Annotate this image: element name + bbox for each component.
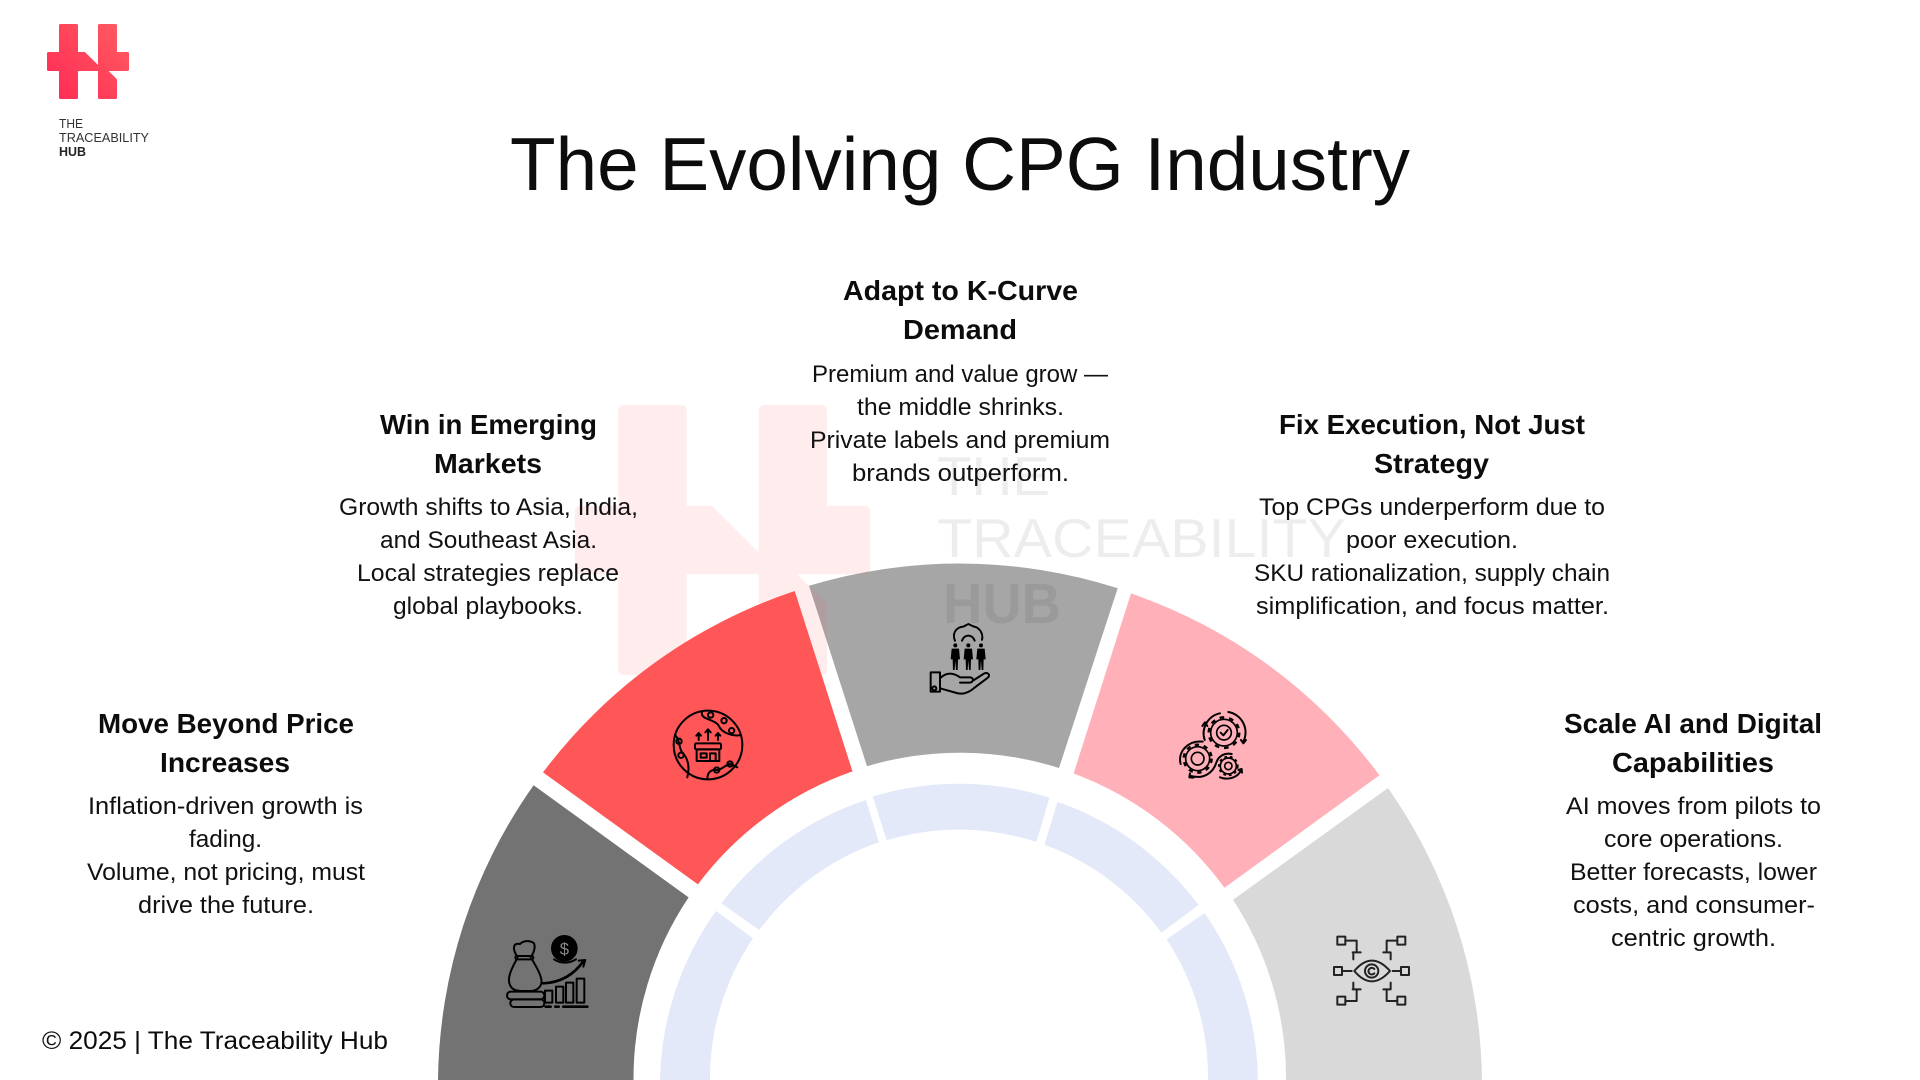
- logo: [48, 26, 149, 159]
- heading: Scale AI and Digital: [1564, 708, 1822, 739]
- body text: Better forecasts, lower: [1570, 859, 1817, 886]
- heading: [380, 409, 597, 479]
- logo mark: [48, 26, 128, 98]
- body text: SKU rationalization, supply chain: [1254, 560, 1610, 587]
- heading: Fix Execution, Not Just: [1279, 409, 1585, 440]
- logo wordmark: [59, 116, 149, 159]
- watermark: logo and wordmark: THE: [937, 445, 1050, 507]
- logo wordmark: HUB: [59, 144, 86, 159]
- body text: Volume, not pricing, must: [87, 859, 365, 886]
- body text: and Southeast Asia.: [380, 527, 597, 554]
- body text: global playbooks.: [393, 593, 583, 620]
- panel: win in emerging markets: [339, 409, 638, 620]
- body text: Top CPGs underperform due to: [1259, 494, 1605, 521]
- copyright: © 2025 | The Traceability Hub: [42, 1027, 388, 1055]
- heading: Markets: [434, 448, 542, 479]
- segment: move beyond price increases: [438, 785, 689, 1080]
- title: The Evolving CPG Industry: [510, 122, 1410, 206]
- segment: fix execution: [1074, 593, 1379, 888]
- panel: fix execution, not just strategy: [1254, 409, 1610, 620]
- watermark: logo and wordmark: [580, 410, 1346, 670]
- panel: adapt to k-curve demand: [810, 275, 1110, 487]
- body text: Local strategies replace: [357, 560, 619, 587]
- body text: Premium and value grow —: [812, 361, 1108, 388]
- semicircle chart: outer ring segments: [438, 564, 1482, 1080]
- heading: [843, 275, 1078, 345]
- body text: brands outperform.: [852, 460, 1069, 487]
- body text: Inflation-driven growth is: [88, 793, 363, 820]
- body text: centric growth.: [1611, 925, 1776, 952]
- body text: [87, 793, 365, 919]
- body text: costs, and consumer-: [1573, 892, 1815, 919]
- panel: scale ai and digital capabilities: [1564, 708, 1822, 952]
- body text: simplification, and focus matter.: [1256, 593, 1609, 620]
- body text: core operations.: [1604, 826, 1783, 853]
- heading: [1279, 409, 1585, 479]
- heading: Win in Emerging: [380, 409, 597, 440]
- body text: drive the future.: [138, 892, 314, 919]
- icon: money bag and rising bar chart: [507, 936, 587, 1007]
- body text: fading.: [189, 826, 262, 853]
- body text: [1566, 793, 1821, 952]
- logo wordmark: THE: [59, 116, 83, 131]
- body text: [810, 361, 1110, 487]
- icon: money bag and rising bar chart: $: [560, 939, 569, 958]
- icon: digital eye circuit: [1334, 937, 1409, 1005]
- body text: [1254, 494, 1610, 620]
- body text: poor execution.: [1346, 527, 1518, 554]
- heading: Capabilities: [1612, 747, 1774, 778]
- body text: Growth shifts to Asia, India,: [339, 494, 638, 521]
- icon: people on hand with gear: [931, 624, 989, 694]
- heading: Demand: [903, 314, 1017, 345]
- watermark: logo and wordmark: HUB: [943, 572, 1061, 636]
- segment: scale ai and digital: [1233, 788, 1482, 1080]
- body text: Private labels and premium: [810, 427, 1110, 454]
- heading: [1564, 708, 1822, 778]
- panel: move beyond price increases: [87, 708, 365, 919]
- segment: adapt to k-curve demand: [809, 564, 1118, 768]
- segment: win in emerging markets: [543, 591, 852, 884]
- watermark: logo and wordmark: TRACEABILITY: [937, 507, 1346, 569]
- icon: globe with store and arrows: [674, 711, 742, 779]
- body text: AI moves from pilots to: [1566, 793, 1821, 820]
- heading: Move Beyond Price: [98, 708, 354, 739]
- logo wordmark: TRACEABILITY: [59, 130, 149, 145]
- heading: Increases: [160, 747, 290, 778]
- heading: Strategy: [1374, 448, 1489, 479]
- body text: the middle shrinks.: [857, 394, 1064, 421]
- inner ring: light blue segments: [660, 784, 1258, 1080]
- icon: three gears: [1180, 712, 1246, 779]
- heading: Adapt to K-Curve: [843, 275, 1078, 306]
- heading: [98, 708, 354, 778]
- body text: [339, 494, 638, 620]
